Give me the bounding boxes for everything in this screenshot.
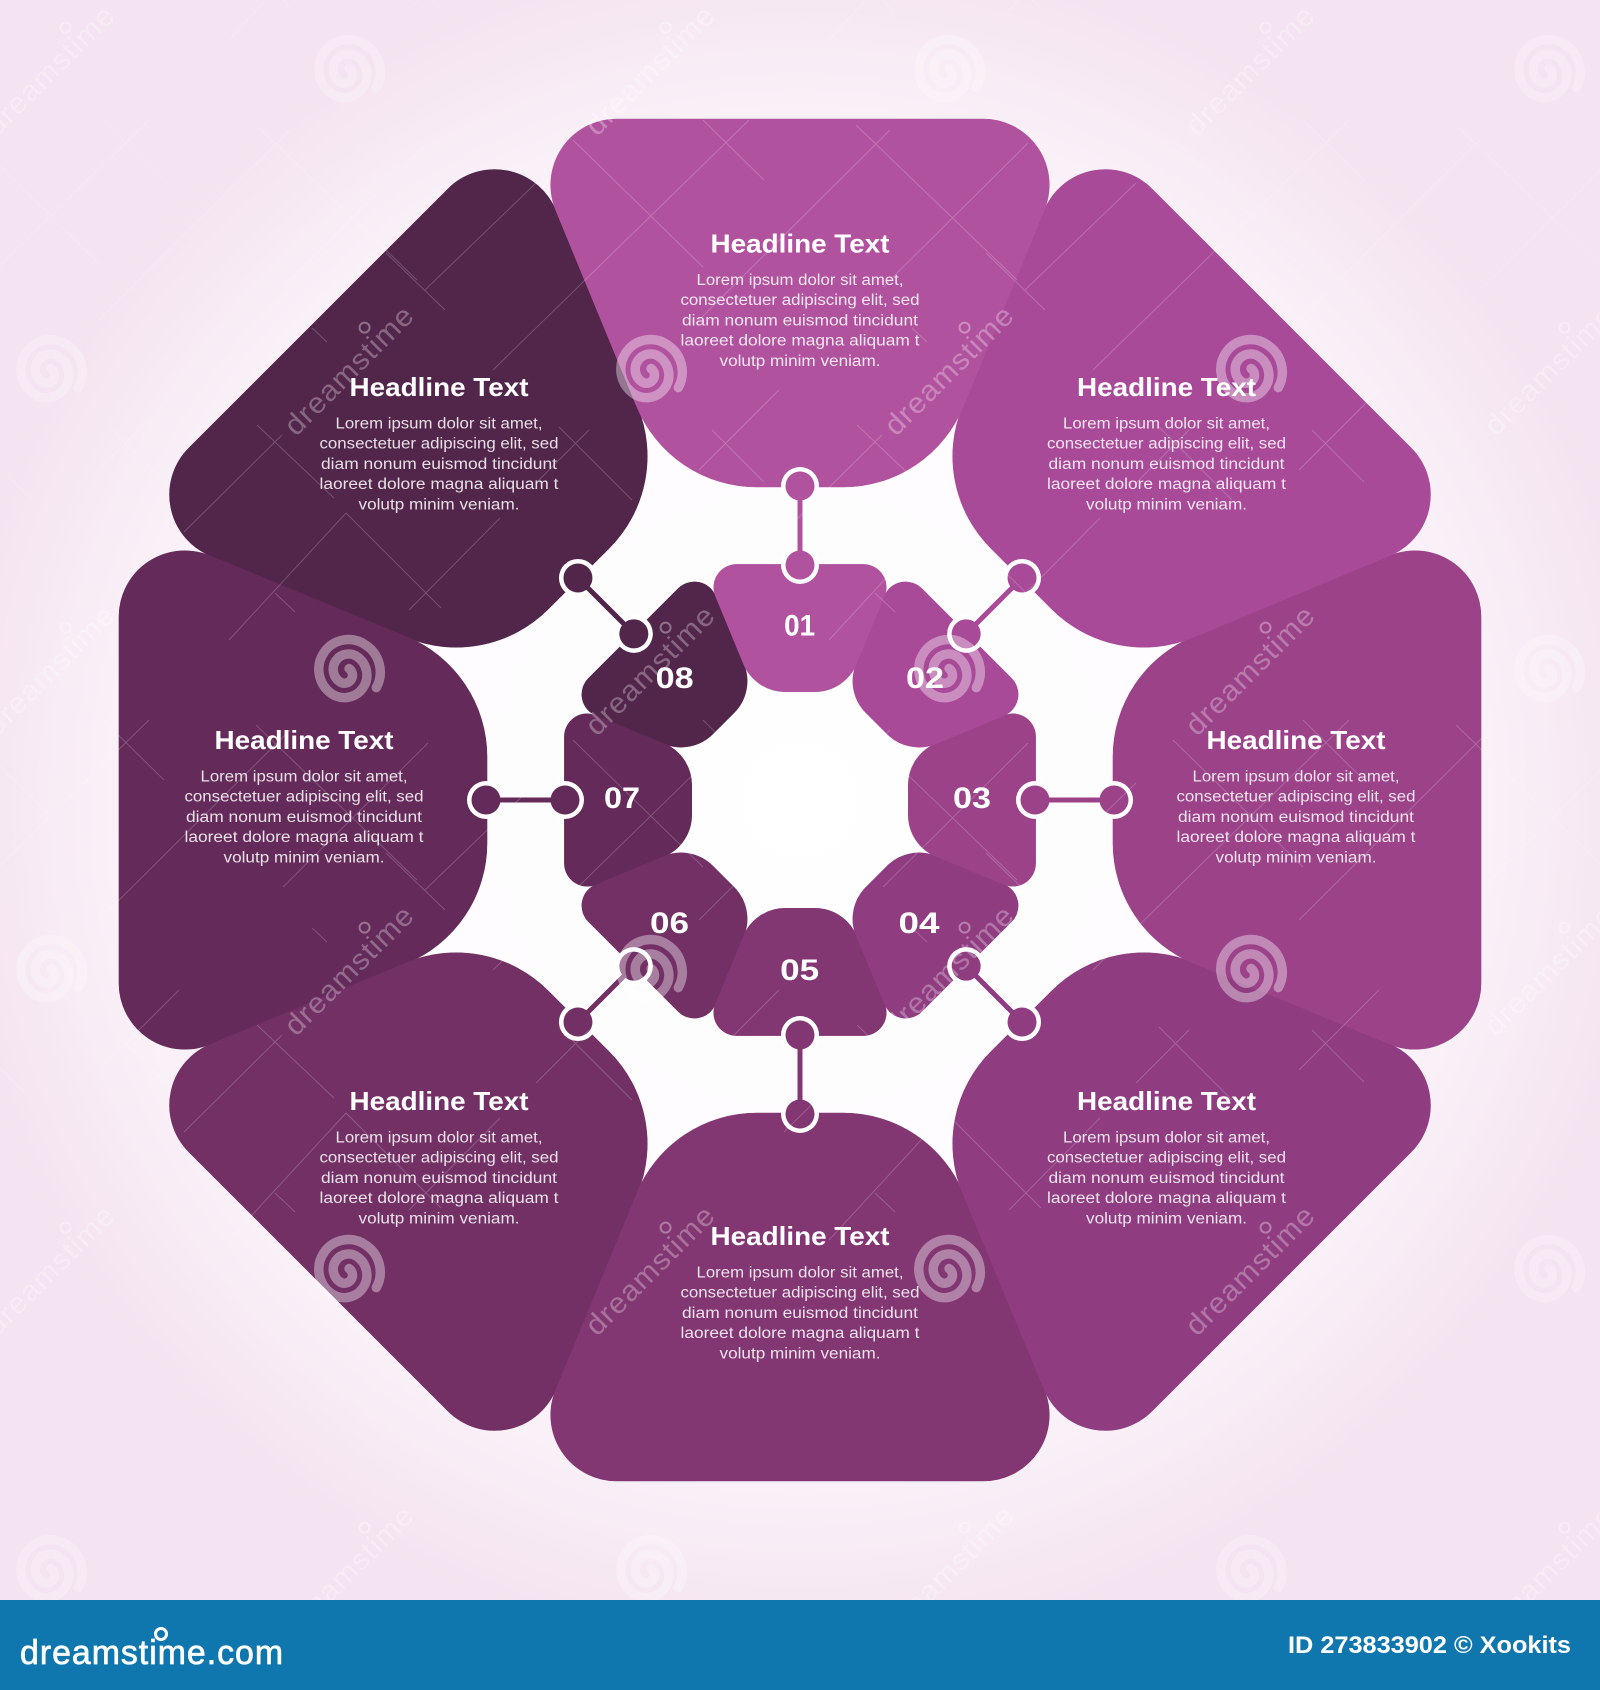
panel 8 headline: Headline Text <box>350 372 529 402</box>
panel 6 body text: consectetuer adipiscing elit, sed <box>320 1150 558 1167</box>
panel 2 body text: diam nonum euismod tincidunt <box>1048 456 1285 473</box>
panel 6 body text: volutp minim veniam. <box>358 1210 520 1227</box>
panel 4 body text: Lorem ipsum dolor sit amet, <box>1063 1130 1270 1146</box>
panel 1 headline: Headline Text <box>710 229 890 259</box>
number 01: 01 <box>784 610 815 642</box>
footer credit: ID 273833902 © Xookits <box>1288 1632 1571 1659</box>
connector 1 <box>781 467 819 584</box>
panel 4 <box>845 845 1458 1458</box>
inner segment 06 <box>572 816 784 1028</box>
number 05: 05 <box>780 954 819 987</box>
panel 7 body text: Lorem ipsum dolor sit amet, <box>200 768 408 786</box>
panel 6 body text: diam nonum euismod tincidunt <box>321 1170 558 1187</box>
panel 2 headline: Headline Text <box>1077 372 1256 402</box>
inner segment 03 <box>908 714 1036 886</box>
panel 5 headline: Headline Text <box>710 1221 890 1251</box>
inner segment 04 <box>816 816 1028 1028</box>
panel 3 body text: Lorem ipsum dolor sit amet, <box>1192 768 1400 786</box>
footer band <box>0 1600 1600 1690</box>
panel 5 <box>551 1113 1049 1481</box>
panel 5 body text: diam nonum euismod tincidunt <box>682 1305 919 1322</box>
panel 1 <box>551 119 1049 487</box>
panel 6 body text: laoreet dolore magna aliquam t <box>320 1190 559 1207</box>
inner segment 07 <box>564 714 692 886</box>
panel 3 body text: volutp minim veniam. <box>1216 849 1376 866</box>
footer logo spiral <box>156 1628 166 1640</box>
panel 5 body text <box>680 1264 920 1362</box>
panel 4 headline: Headline Text <box>1077 1086 1256 1116</box>
panel 1 body text: volutp minim veniam. <box>720 353 880 370</box>
panel 8 body text <box>320 416 559 513</box>
panel 7 body text <box>184 768 424 866</box>
inner segment 08 <box>572 572 784 784</box>
panel 2 body text <box>1047 416 1287 513</box>
panel 4 body text: volutp minim veniam. <box>1086 1210 1247 1227</box>
panel 3 body text: diam nonum euismod tincidunt <box>1178 809 1415 826</box>
inner segment 05 <box>714 908 886 1036</box>
panel 8 body text: Lorem ipsum dolor sit amet, <box>336 416 542 432</box>
connector 6 <box>551 939 661 1049</box>
panel 2 body text: volutp minim veniam. <box>1086 496 1247 513</box>
panel 6 body text <box>320 1130 559 1227</box>
number 03: 03 <box>953 782 991 815</box>
connector 4 <box>939 939 1049 1049</box>
panel 3 body text: laoreet dolore magna aliquam t <box>1176 829 1416 846</box>
number 02: 02 <box>906 662 944 695</box>
connector 5 <box>781 1016 819 1133</box>
panel 1 body text: Lorem ipsum dolor sit amet, <box>696 272 904 289</box>
panel 5 body text: laoreet dolore magna aliquam t <box>680 1325 920 1342</box>
panel 4 body text <box>1047 1130 1287 1227</box>
panel 2 body text: laoreet dolore magna aliquam t <box>1047 476 1287 493</box>
panel 4 body text: consectetuer adipiscing elit, sed <box>1047 1150 1286 1167</box>
panel 8 body text: consectetuer adipiscing elit, sed <box>320 436 558 453</box>
panel 7 body text: consectetuer adipiscing elit, sed <box>184 789 424 806</box>
panel 7 body text: diam nonum euismod tincidunt <box>186 809 423 826</box>
panel 6 <box>142 845 755 1458</box>
panel 3 <box>1113 551 1481 1049</box>
panel 7 headline: Headline Text <box>214 725 394 755</box>
panel 6 headline: Headline Text <box>350 1086 529 1116</box>
panel 7 body text: laoreet dolore magna aliquam t <box>184 829 424 846</box>
panel 3 body text: consectetuer adipiscing elit, sed <box>1176 789 1416 806</box>
panel 2 <box>845 142 1458 755</box>
panel 8 body text: diam nonum euismod tincidunt <box>321 456 558 473</box>
panel 7 body text: volutp minim veniam. <box>224 849 384 866</box>
panel 5 body text: consectetuer adipiscing elit, sed <box>680 1285 920 1302</box>
panel 1 body text: laoreet dolore magna aliquam t <box>680 333 920 350</box>
connector 7 <box>467 781 584 819</box>
panel 1 body text: diam nonum euismod tincidunt <box>682 312 919 329</box>
number 08: 08 <box>656 662 694 695</box>
panel 6 body text: Lorem ipsum dolor sit amet, <box>336 1130 542 1146</box>
panel 8 body text: volutp minim veniam. <box>358 496 520 513</box>
panel 8 <box>142 142 755 755</box>
panel 8 body text: laoreet dolore magna aliquam t <box>320 476 559 493</box>
number 04: 04 <box>898 907 940 940</box>
panel 3 body text <box>1176 768 1416 866</box>
connector 2 <box>939 551 1049 661</box>
panel 5 body text: Lorem ipsum dolor sit amet, <box>696 1264 904 1282</box>
panel 3 headline: Headline Text <box>1206 725 1386 755</box>
panel 1 body text <box>680 272 920 370</box>
panel 7 <box>119 551 487 1049</box>
number 06: 06 <box>650 907 689 940</box>
footer logo text: dreamstime.com <box>20 1634 284 1672</box>
panel 2 body text: consectetuer adipiscing elit, sed <box>1047 436 1286 453</box>
connector 8 <box>551 551 661 661</box>
panel 2 body text: Lorem ipsum dolor sit amet, <box>1063 416 1270 432</box>
number 07: 07 <box>604 782 640 815</box>
inner segment 01 <box>714 564 886 692</box>
panel 4 body text: diam nonum euismod tincidunt <box>1048 1170 1285 1187</box>
panel 5 body text: volutp minim veniam. <box>720 1345 880 1362</box>
panel 1 body text: consectetuer adipiscing elit, sed <box>680 292 920 309</box>
inner segment 02 <box>816 572 1028 784</box>
connector 3 <box>1016 781 1133 819</box>
panel 4 body text: laoreet dolore magna aliquam t <box>1047 1190 1287 1207</box>
